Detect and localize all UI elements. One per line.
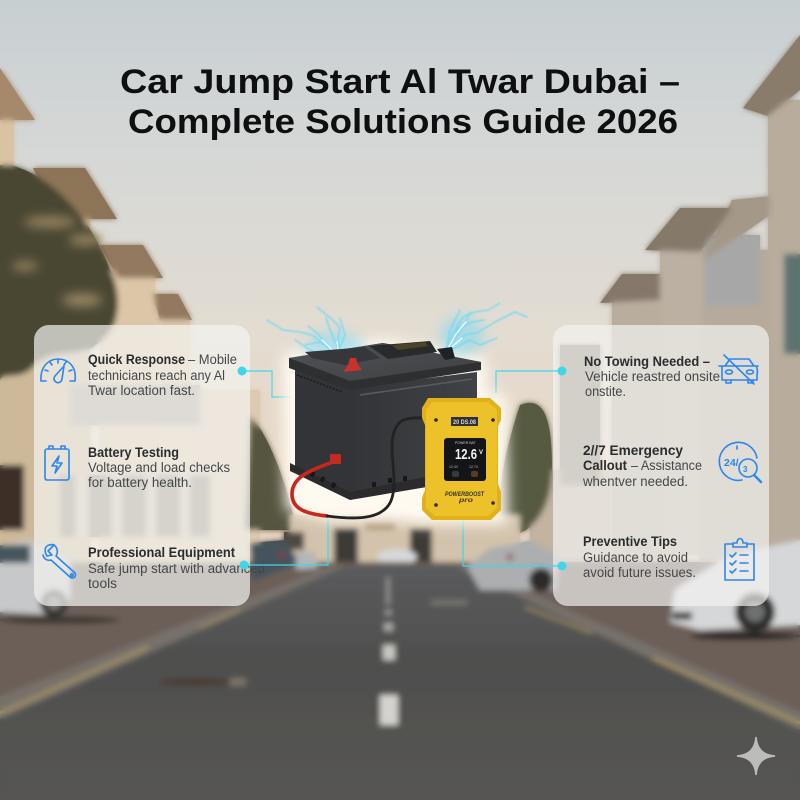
- icon: wrench: [43, 545, 76, 578]
- parked cars: [0, 540, 800, 640]
- item: no towing needed: onstite.: [585, 384, 626, 399]
- panel: left benefits: [34, 325, 265, 606]
- device top label: 20 DS.08: [453, 419, 476, 426]
- item: quick response: [41, 352, 237, 398]
- item: 24/7 emergency callout: [582, 442, 761, 489]
- battery body: [289, 341, 481, 500]
- item: professional equipment: Safe jump start with advanced: [88, 561, 265, 576]
- device screen: V: [479, 450, 483, 456]
- item: no towing needed: No Towing Needed –: [584, 354, 710, 369]
- icon: clipboard checklist: [725, 538, 754, 580]
- item: quick response: Quick Response: [88, 352, 185, 367]
- panel: right benefits: [553, 325, 769, 606]
- connector: preventive tips to booster: [463, 520, 566, 570]
- item: preventive tips: Preventive Tips: [583, 534, 677, 549]
- item: battery testing: [45, 445, 230, 490]
- device screen: 12.6: [455, 446, 477, 463]
- lane dashes: [380, 695, 398, 725]
- right buildings: [530, 35, 800, 570]
- icon: clock with magnifier: 24/: [724, 457, 739, 469]
- pavement and road: [0, 562, 800, 800]
- item: quick response: Twar location fast.: [88, 383, 195, 398]
- yellow jump starter device: [422, 398, 501, 520]
- jumper cable: [292, 418, 423, 518]
- item: no towing needed: [584, 354, 758, 399]
- item: no towing needed: Vehicle reastred onsite: [585, 369, 720, 384]
- item: battery testing: for battery health.: [88, 475, 192, 490]
- icon: clock with magnifier: [719, 442, 761, 482]
- title: Car Jump Start Al Twar Dubai –: [120, 63, 680, 101]
- item: professional equipment: tools: [88, 576, 117, 591]
- connector: no towing to battery: [496, 366, 566, 393]
- device brand: pro: [458, 498, 473, 504]
- item: 24/7 emergency callout: whentver needed.: [582, 474, 688, 489]
- connector: professional equipment to battery: [240, 515, 328, 570]
- title: [120, 63, 680, 141]
- item: battery testing: Voltage and load checks: [88, 460, 230, 475]
- item: preventive tips: Guidance to avoid: [583, 550, 688, 565]
- item: 24/7 emergency callout: 2//7 Emergency: [583, 443, 683, 458]
- item: quick response: technicians reach any Al: [88, 368, 225, 383]
- device screen: 12.4V: [449, 465, 459, 469]
- device brand: POWERBOOST: [445, 491, 485, 498]
- illustration: battery and jump starter: [267, 303, 527, 524]
- icon: crossed-out car: [719, 355, 758, 384]
- device screen: 12.7V: [469, 465, 479, 469]
- left buildings: [0, 68, 260, 570]
- icon: clock with magnifier: 3: [743, 465, 748, 474]
- connector: quick response to battery: [238, 366, 295, 397]
- distant houses: [284, 515, 520, 565]
- item: quick response: – Mobile: [188, 352, 237, 367]
- icon: sparkle watermark: [737, 737, 775, 775]
- item: professional equipment: Professional Equipment: [88, 545, 235, 560]
- title: Complete Solutions Guide 2026: [128, 103, 678, 141]
- red positive terminal: [343, 358, 362, 372]
- item: 24/7 emergency callout: Callout: [583, 458, 627, 473]
- item: preventive tips: [583, 534, 754, 580]
- palm trees: [0, 165, 552, 536]
- device brand: [445, 491, 485, 504]
- item: 24/7 emergency callout: – Assistance: [631, 458, 702, 473]
- item: professional equipment: [43, 545, 265, 591]
- device screen: POWER BAT: [455, 441, 477, 445]
- icon: speedometer gauge: [41, 359, 75, 383]
- lightning: right terminal: [440, 303, 527, 356]
- icon: battery with bolt: [45, 446, 69, 480]
- white glow halo: [283, 339, 508, 524]
- lightning: left terminal: [267, 307, 365, 368]
- device screen: [444, 438, 486, 481]
- item: battery testing: Battery Testing: [88, 445, 179, 460]
- item: preventive tips: avoid future issues.: [583, 565, 696, 580]
